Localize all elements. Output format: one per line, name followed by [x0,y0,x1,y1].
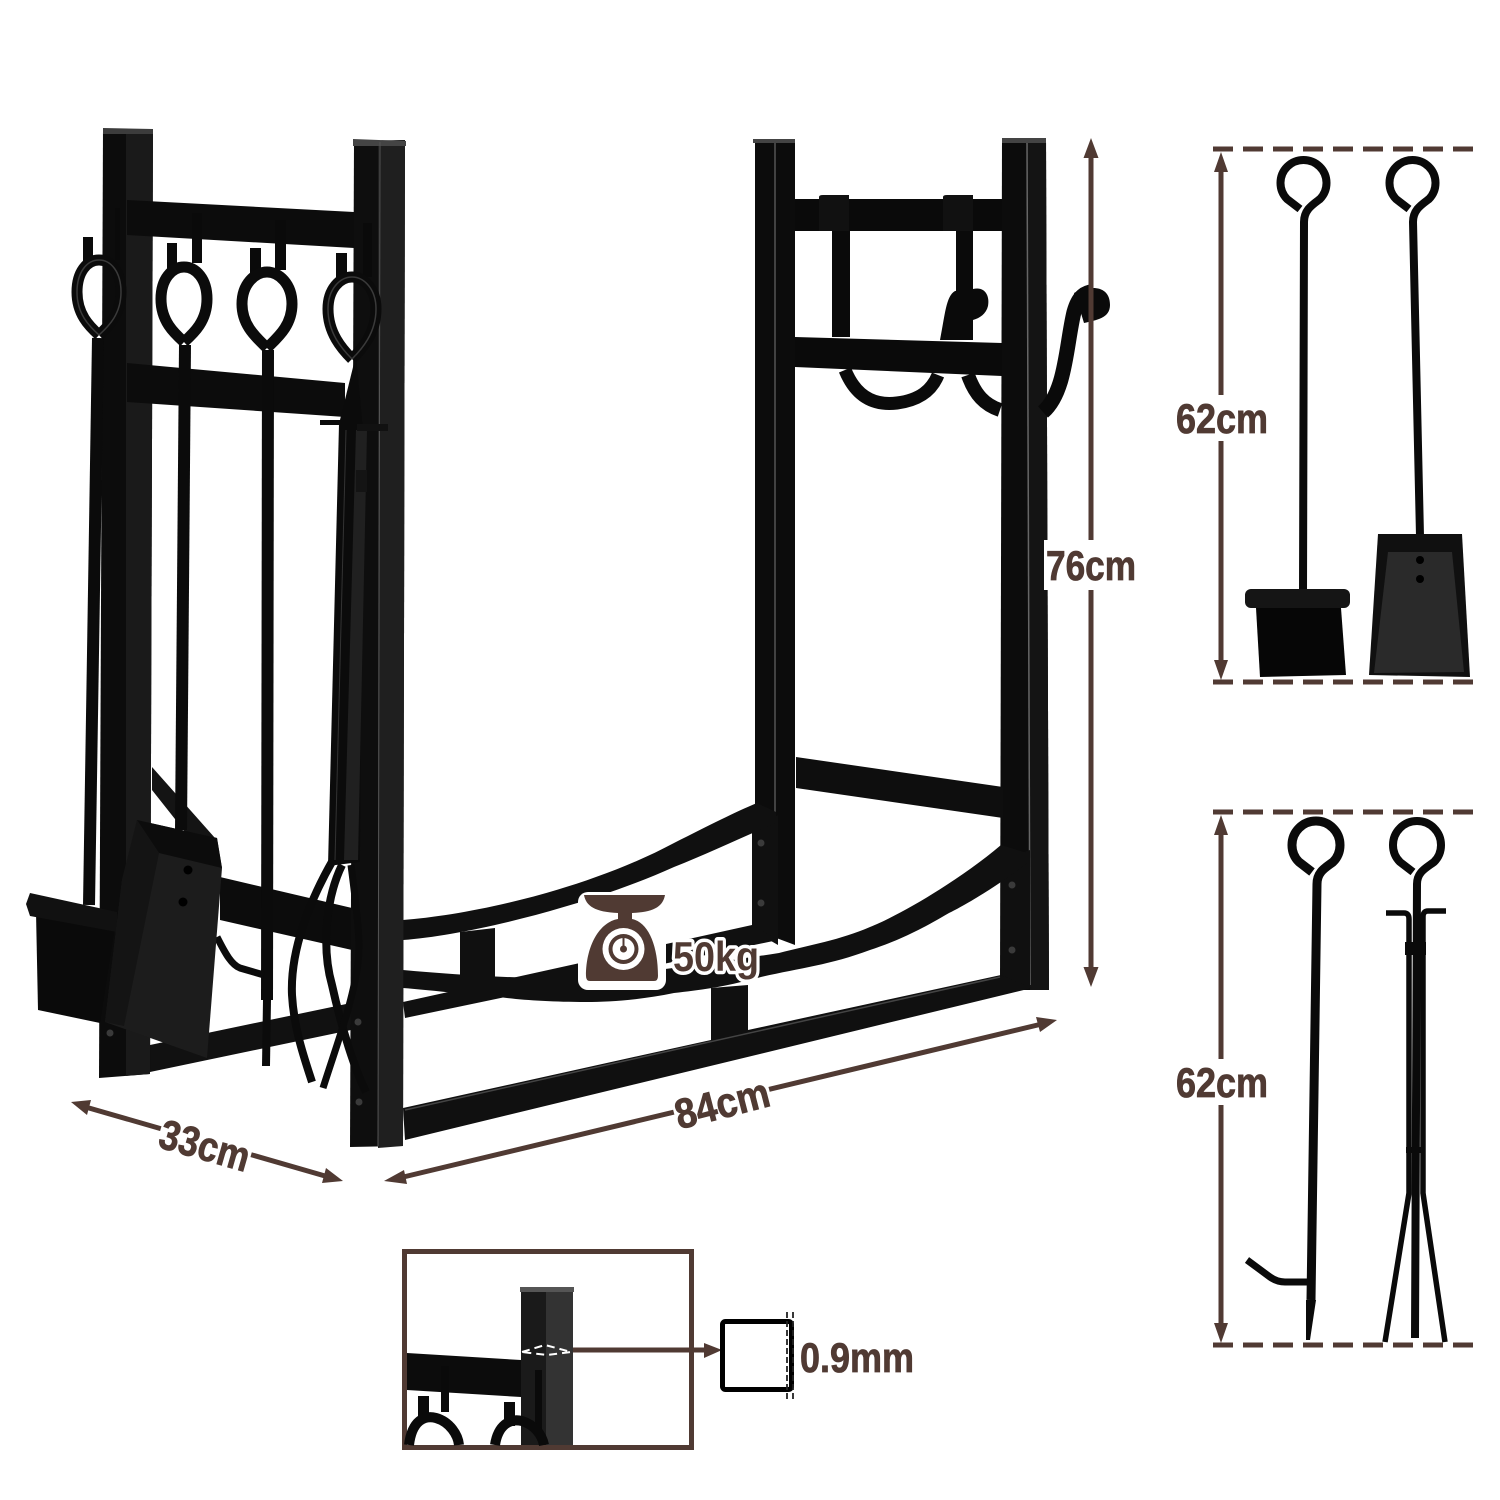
shovel on rack [105,820,222,1058]
height arrow 76cm: 76cm [1046,542,1136,589]
width arrow 84cm: 84cm [670,1069,774,1138]
brush and shovel dimension 62cm: 62cm [1176,395,1268,442]
rack: curved bottom rails [403,803,1032,1140]
scale icon with 50kg label [578,892,759,990]
tong shafts on rack [328,355,388,866]
inset: post close-up [407,1287,574,1445]
tool: tongs [1385,821,1446,1342]
cross-section square [722,1312,793,1400]
height arrow 76cm [1044,138,1138,987]
brush and shovel dimension 62cm [1175,149,1473,682]
tool rings and rods on rack [77,260,376,1066]
icon: kitchen scale [578,892,666,990]
rack: log strap hangers [819,195,1110,412]
log rack with tools [26,128,1110,1148]
detail inset panel [404,1252,914,1448]
brush on rack [26,893,117,1023]
tool: poker [1247,821,1340,1340]
depth arrow 33cm [71,1100,343,1183]
rack: left front post [350,139,406,1148]
thickness label: 0.9mm [800,1334,914,1381]
depth arrow 33cm: 33cm [154,1110,256,1181]
arrow to cross-section [573,1343,722,1358]
tongs on rack [292,860,366,1092]
poker and tongs dimension 62cm [1175,812,1473,1345]
rack: hanging hooks [83,208,372,425]
rack: right side frame [753,138,1049,990]
weight label: 50kg [673,933,759,980]
width arrow 84cm [384,1017,1057,1184]
inset frame [404,1252,692,1448]
poker hook on rack [217,937,264,975]
tool: shovel [1369,160,1470,677]
rack: left rear post and bars [99,128,354,1078]
poker and tongs dimension 62cm: 62cm [1176,1059,1268,1106]
tool: brush [1245,160,1350,677]
